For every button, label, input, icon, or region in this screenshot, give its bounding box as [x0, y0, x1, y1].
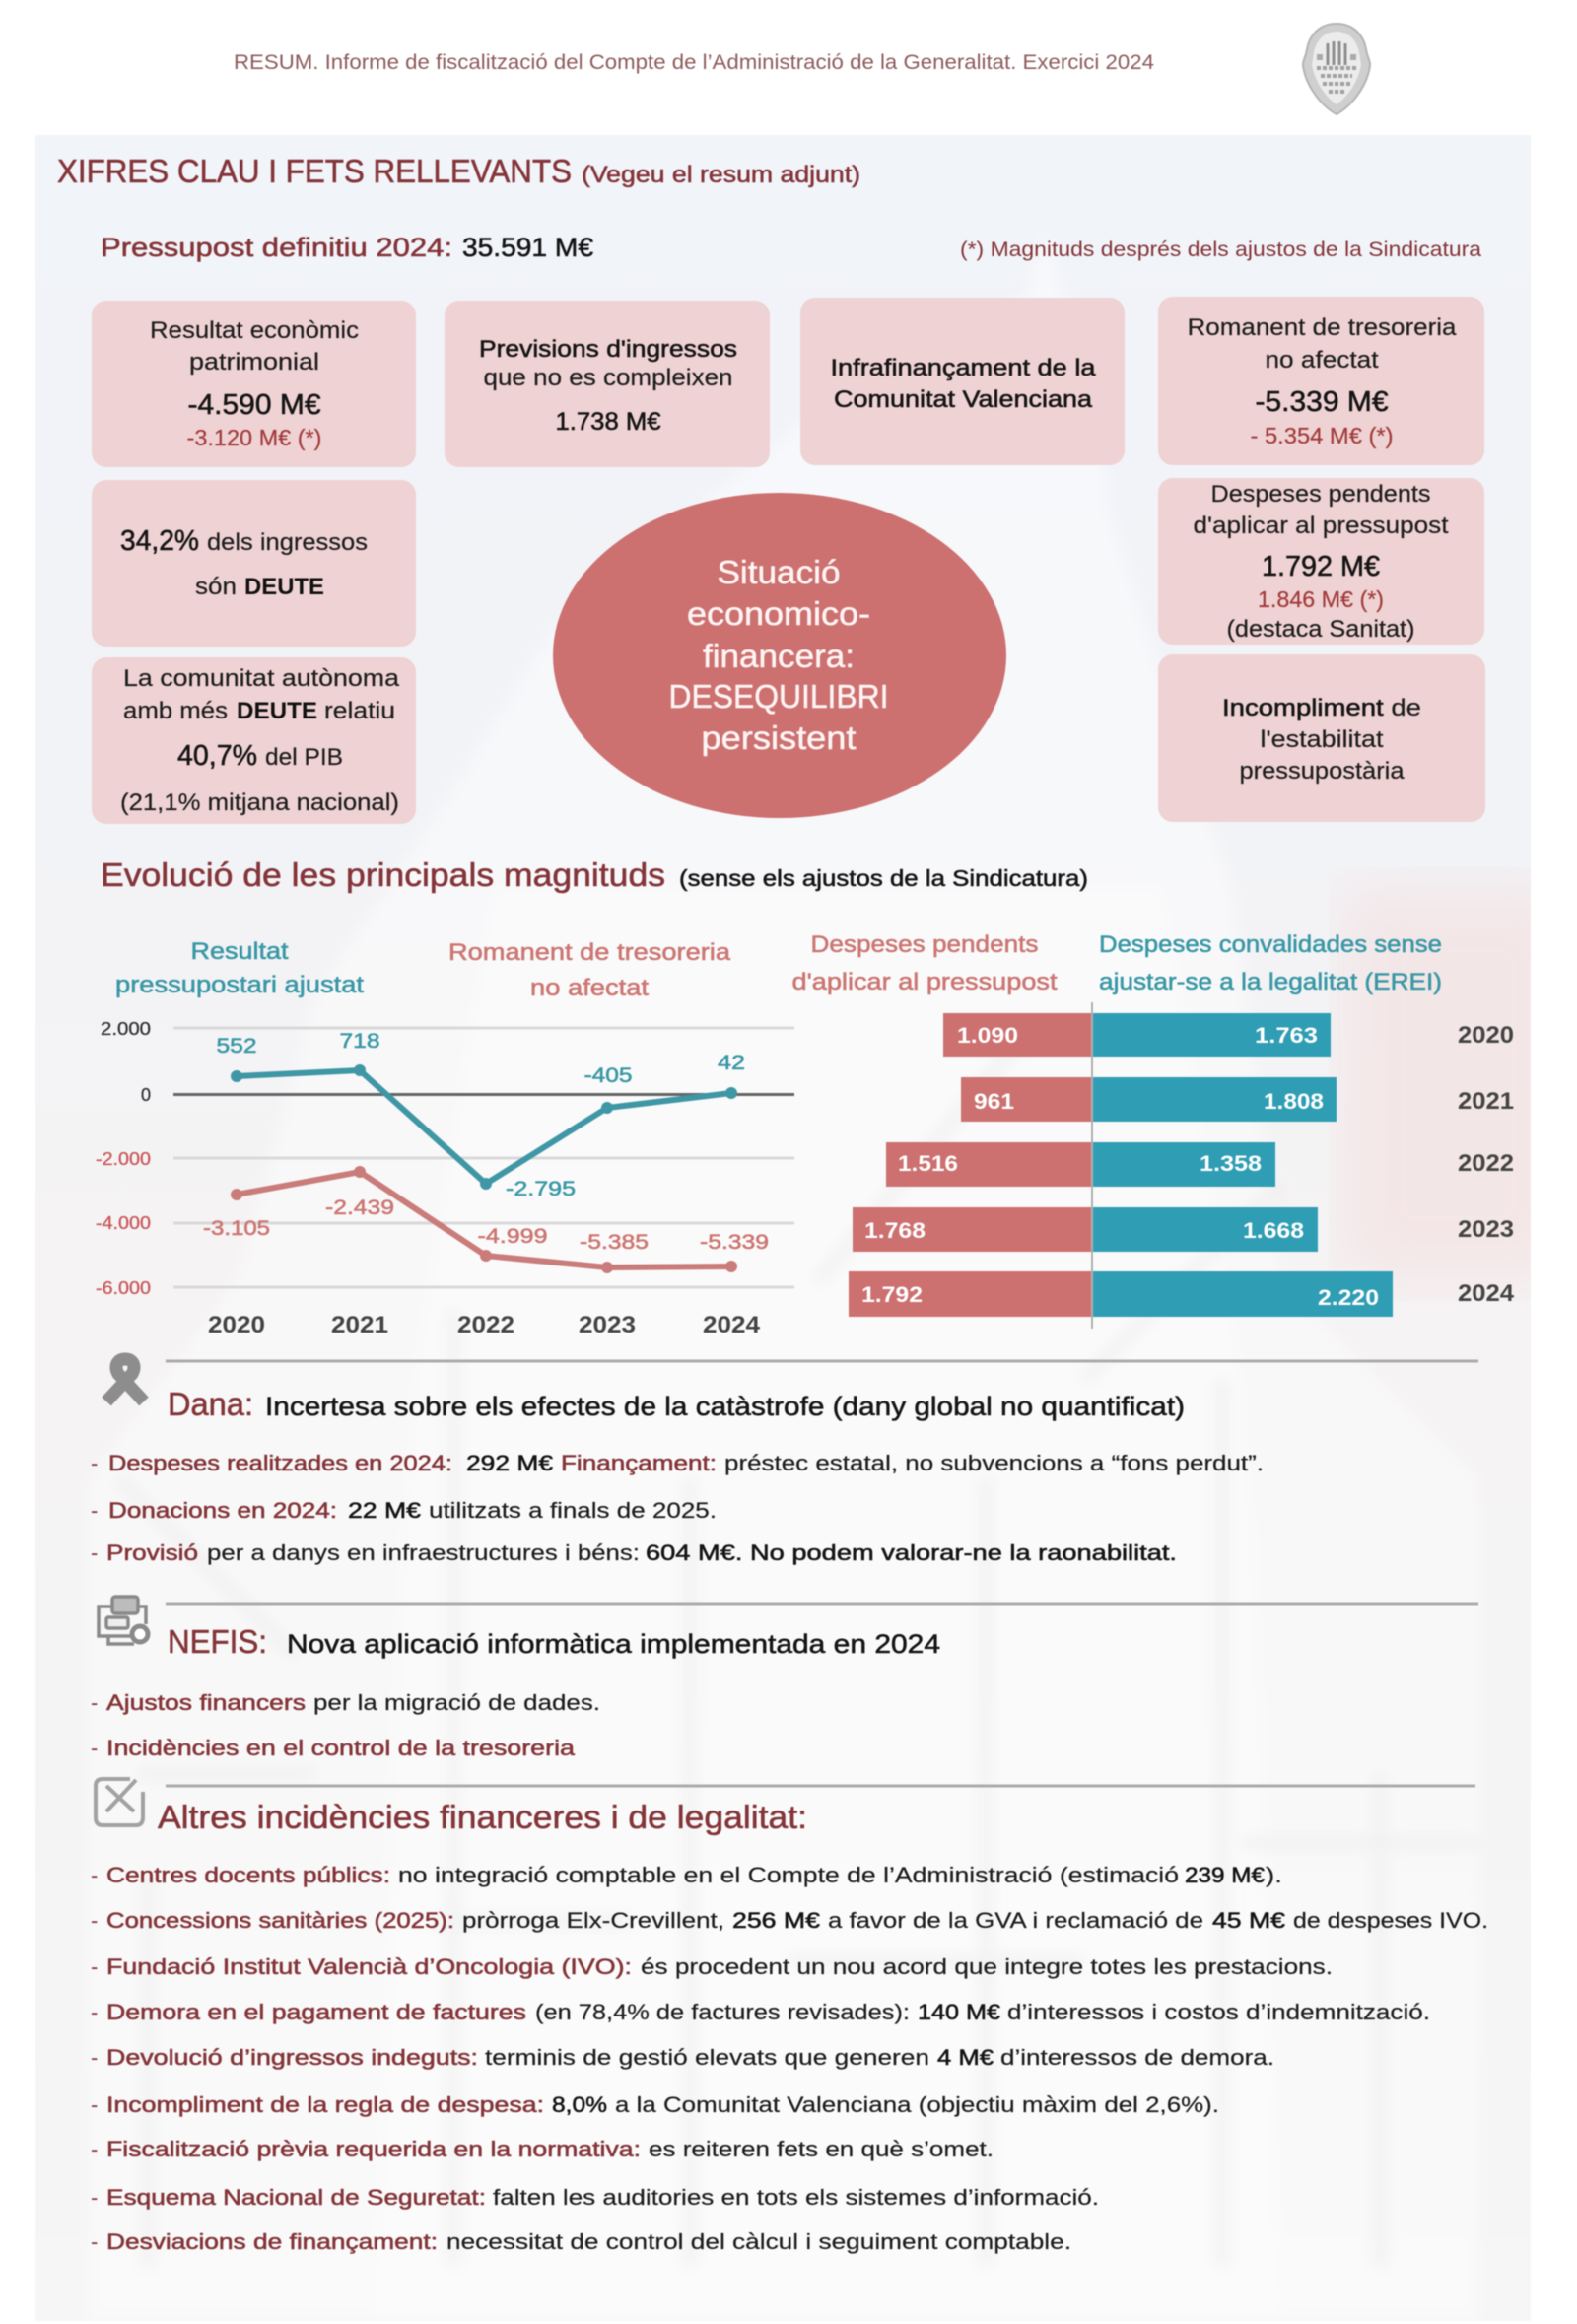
list item: IVO foundation: és procedent un nou acord que integre totes les prestacions.	[641, 1954, 1333, 1979]
list item: spending rule: Incompliment de la regla de despesa:	[106, 2092, 544, 2117]
list item: donations: -	[91, 1498, 98, 1523]
panel: pending expenses	[1158, 478, 1484, 645]
panel: pending expenses: d'aplicar al pressupost	[1193, 513, 1449, 539]
heading: other incidents: Altres incidències financeres i de legalitat:	[158, 1799, 807, 1835]
list item: provision: 604 M€. No podem valorar-ne la raonabilitat.	[646, 1540, 1177, 1565]
list item: health concessions: de despeses IVO.	[1293, 1908, 1488, 1933]
panel: highest relative debt: DEUTE	[237, 698, 317, 724]
panel: highest relative debt	[92, 657, 416, 824]
legend: adjusted budget result	[115, 938, 364, 998]
panel: unmet revenue forecasts: Previsions d'ingressos	[479, 336, 737, 363]
list item: IVO foundation	[91, 1954, 1333, 1979]
list item: data migration	[91, 1690, 600, 1715]
panel: unallocated treasury remainder: -5.339 M€	[1256, 386, 1388, 418]
list item: provision: Provisió	[106, 1540, 198, 1565]
panel: pending expenses: 1.846 M€ (*)	[1258, 586, 1384, 612]
panel: income from debt: són	[195, 574, 237, 600]
panel: underfunding	[800, 298, 1125, 465]
x axis years	[208, 1312, 761, 1338]
icon: crossed box	[96, 1779, 143, 1825]
panel: highest relative debt: (21,1% mitjana nacional)	[120, 789, 399, 816]
list item: public schools: Centres docents públics:	[106, 1863, 390, 1887]
list item: undue income refunds	[91, 2045, 1274, 2070]
bars: 2023: 2023	[1458, 1216, 1514, 1243]
section: other incidents	[91, 1779, 1488, 2254]
y axis labels: 2.000	[101, 1019, 151, 1039]
bars: 2024	[849, 1271, 1515, 1317]
chart: diverging bars of pending and validated expenses	[792, 931, 1515, 1329]
panel: economic result: -3.120 M€ (*)	[187, 425, 321, 450]
list item: spending rule: -	[91, 2092, 98, 2117]
series: budget result line: -405	[583, 1064, 633, 1087]
heading: evolution of main figures: (sense els ajustos de la Sindicatura)	[679, 865, 1088, 891]
section: NEFIS	[91, 1597, 940, 1760]
bars: 2021: 1.808	[1264, 1089, 1324, 1114]
panel: central diagnosis	[553, 493, 1006, 818]
bars: 2022	[886, 1142, 1514, 1187]
panel: highest relative debt: 40,7%	[177, 740, 257, 772]
legend: unallocated treasury remainder	[448, 939, 731, 1001]
panel: unallocated treasury remainder	[1158, 297, 1484, 465]
heading: Dana: Incertesa sobre els efectes de la catàstrofe (dany global no quantificat)	[265, 1392, 1185, 1421]
panel: pending expenses: Despeses pendents	[1210, 481, 1431, 508]
bars: 2021: 961	[974, 1089, 1014, 1114]
legend: pending expenses: d'aplicar al pressupost	[792, 969, 1058, 995]
list item: donations: 22 M€	[348, 1498, 421, 1523]
list item: prior audit: es reiteren fets en què s’omet.	[649, 2137, 994, 2161]
bars: 2021: 2021	[1458, 1088, 1514, 1115]
list item: funding deviations: necessitat de control del càlcul i seguiment comptable.	[446, 2229, 1071, 2254]
panel: highest relative debt: La comunitat autònoma	[123, 665, 400, 692]
list item: prior audit: Fiscalització prèvia requerida en la normativa:	[106, 2137, 641, 2161]
heading: evolution of main figures	[101, 856, 1088, 893]
panel: income from debt: 34,2%	[120, 525, 199, 557]
legend: validated expenses: ajustar-se a la legalitat (EREI)	[1099, 969, 1442, 995]
x axis years: 2024	[703, 1312, 761, 1338]
bars: 2024: 2.220	[1318, 1285, 1379, 1310]
series: budget result line: 42	[718, 1052, 745, 1074]
panel: pending expenses: (destaca Sanitat)	[1226, 616, 1415, 643]
title	[57, 153, 860, 189]
list item: funding deviations: Desviacions de finançament:	[106, 2229, 438, 2254]
panel: economic result	[92, 301, 416, 467]
x axis years: 2022	[457, 1312, 514, 1338]
panel: unmet revenue forecasts: 1.738 M€	[556, 408, 661, 436]
legend: adjusted budget result: Resultat	[191, 938, 289, 965]
bars: 2022: 1.358	[1200, 1151, 1262, 1176]
panel: income from debt: dels ingressos	[207, 529, 368, 556]
title: (Vegeu el resum adjunt)	[582, 162, 860, 188]
list item: prior audit	[91, 2137, 994, 2161]
list item: spending rule: a la Comunitat Valenciana (objectiu màxim del 2,6%).	[615, 2092, 1219, 2117]
panel: highest relative debt: relatiu	[324, 698, 395, 724]
list item: data migration: per la migració de dades.	[313, 1690, 600, 1715]
x axis years: 2021	[331, 1312, 388, 1338]
legend: validated expenses	[1099, 931, 1442, 995]
panel: underfunding: Comunitat Valenciana	[834, 386, 1093, 413]
list item: health concessions: 45 M€	[1212, 1908, 1285, 1933]
series: budget result line	[217, 1030, 745, 1200]
list item: IVO foundation: -	[91, 1954, 98, 1979]
panel: unallocated treasury remainder: - 5.354 M€ (*)	[1250, 423, 1394, 448]
list item: undue income refunds: terminis de gestió elevats que generen	[485, 2045, 929, 2070]
panel: pending expenses: 1.792 M€	[1262, 551, 1380, 582]
legend: unallocated treasury remainder: no afectat	[530, 975, 649, 1001]
panel: budget stability breach	[1158, 654, 1485, 822]
list item: expenses 2024: Despeses realitzades en 2024:	[108, 1451, 452, 1475]
icon: mourning ribbon	[106, 1359, 144, 1401]
list item: expenses 2024: Finançament:	[561, 1451, 717, 1475]
panel: unmet revenue forecasts: que no es compleixen	[483, 365, 733, 391]
list item: treasury control: -	[91, 1736, 98, 1760]
series: treasury remainder line: -5.339	[700, 1231, 769, 1254]
heading: NEFIS: NEFIS:	[168, 1623, 267, 1660]
heading: final budget: 35.591 M€	[462, 233, 593, 262]
bars: 2023: 1.768	[864, 1218, 926, 1243]
list item: data migration: Ajustos financers	[106, 1690, 306, 1715]
list item: undue income refunds: d’interessos de demora.	[1000, 2045, 1274, 2070]
list item: data migration: -	[91, 1690, 98, 1715]
list item: national security scheme	[91, 2185, 1099, 2210]
list item: national security scheme: falten les auditories en tots els sistemes d’informació.	[493, 2185, 1099, 2210]
list item: public schools: 239 M€	[1185, 1863, 1265, 1887]
list item: spending rule: 8,0%	[552, 2092, 607, 2117]
y axis labels: -6.000	[96, 1278, 151, 1298]
list item: prior audit: -	[91, 2137, 98, 2161]
panel: central diagnosis: Situació	[718, 554, 840, 590]
list item: public schools	[91, 1863, 1282, 1887]
list item: provision	[91, 1540, 1177, 1565]
title: XIFRES CLAU I FETS RELLEVANTS	[57, 153, 572, 189]
legend: unallocated treasury remainder: Romanent de tresoreria	[448, 939, 731, 966]
panel: unallocated treasury remainder: Romanent de tresoreria	[1187, 314, 1457, 341]
list item: national security scheme: Esquema Nacional de Seguretat:	[106, 2185, 486, 2210]
list item: health concessions: -	[91, 1908, 98, 1933]
icon: computer with gear	[99, 1597, 148, 1644]
list item: invoice payment delay: d’interessos i costos d’indemnització.	[1007, 2000, 1430, 2024]
note: after audit adjustments: (*) Magnituds després dels ajustos de la Sindicatura	[960, 239, 1481, 261]
panel: income from debt	[92, 480, 416, 647]
list item: health concessions: Concessions sanitàries (2025):	[106, 1908, 454, 1933]
panel: central diagnosis: financera:	[703, 638, 855, 674]
bars: 2024: 1.792	[861, 1282, 923, 1307]
bars: 2021	[961, 1077, 1514, 1122]
panel: underfunding: Infrafinançament de la	[830, 355, 1096, 381]
bars: 2020: 2020	[1458, 1022, 1514, 1049]
legend: pending expenses: Despeses pendents	[810, 931, 1039, 958]
section: Dana	[91, 1359, 1264, 1565]
series: budget result line: -2.795	[506, 1178, 576, 1200]
list item: health concessions: pròrroga Elx-Crevillent,	[462, 1908, 724, 1933]
list item: invoice payment delay: 140 M€	[918, 2000, 1000, 2024]
list item: expenses 2024	[91, 1451, 1264, 1475]
heading: Dana: Dana:	[168, 1386, 253, 1422]
panel: unmet revenue forecasts	[445, 301, 770, 467]
panel: highest relative debt: del PIB	[265, 744, 343, 771]
list item: undue income refunds: -	[91, 2045, 98, 2070]
panel: highest relative debt: amb més	[123, 698, 228, 724]
legend: adjusted budget result: pressupostari ajustat	[115, 972, 364, 998]
list item: invoice payment delay: -	[91, 2000, 98, 2024]
panel: budget stability breach: pressupostària	[1240, 758, 1405, 785]
list item: expenses 2024: préstec estatal, no subvencions a “fons perdut”.	[724, 1451, 1264, 1475]
list item: undue income refunds: 4 M€	[937, 2045, 994, 2070]
series: treasury remainder line: -2.439	[325, 1196, 394, 1219]
chart: line chart of budget result and treasury remainder	[96, 938, 794, 1338]
series: treasury remainder line: -3.105	[203, 1217, 270, 1240]
list item: donations: Donacions en 2024:	[108, 1498, 337, 1523]
list item: invoice payment delay	[91, 2000, 1430, 2024]
panel: central diagnosis: persistent	[702, 719, 856, 756]
list item: health concessions: a favor de la GVA i reclamació de	[828, 1908, 1203, 1933]
panel: budget stability breach: l'estabilitat	[1260, 726, 1384, 753]
series: budget result line: 552	[217, 1035, 256, 1058]
list item: donations: utilitzats a finals de 2025.	[429, 1498, 717, 1523]
list item: invoice payment delay: (en 78,4% de factures revisades):	[535, 2000, 910, 2024]
y axis labels: 0	[141, 1085, 151, 1105]
panel: central diagnosis: economico-	[687, 595, 870, 632]
icon: institutional shield logo	[1303, 24, 1370, 114]
bars: 2023	[853, 1207, 1514, 1252]
legend: validated expenses: Despeses convalidades sense	[1099, 931, 1442, 958]
panel: unallocated treasury remainder: no afectat	[1266, 347, 1379, 374]
list item: national security scheme: -	[91, 2185, 98, 2210]
heading: evolution of main figures: Evolució de les principals magnituds	[101, 856, 665, 893]
bars: 2022: 2022	[1458, 1150, 1514, 1177]
panel: economic result: Resultat econòmic	[150, 317, 359, 344]
y axis labels: -2.000	[96, 1149, 151, 1169]
series: treasury remainder line	[203, 1166, 769, 1273]
bars: 2023: 1.668	[1243, 1218, 1304, 1243]
list item: IVO foundation: Fundació Institut Valencià d’Oncologia (IVO):	[106, 1954, 632, 1979]
x axis years: 2020	[208, 1312, 265, 1338]
list item: public schools: -	[91, 1863, 98, 1887]
bars: 2022: 1.516	[898, 1151, 958, 1176]
panel: income from debt: DEUTE	[244, 574, 324, 600]
bars: 2020: 1.090	[957, 1023, 1018, 1048]
heading: NEFIS: Nova aplicació informàtica implementada en 2024	[287, 1629, 940, 1659]
legend: pending expenses	[792, 931, 1058, 995]
list item: treasury control: Incidències en el control de la tresoreria	[106, 1736, 576, 1760]
panel: budget stability breach: Incompliment de	[1222, 695, 1421, 721]
list item: undue income refunds: Devolució d’ingressos indeguts:	[106, 2045, 478, 2070]
panel: central diagnosis: DESEQUILIBRI	[668, 678, 889, 715]
bars: 2020	[943, 1013, 1514, 1057]
series: treasury remainder line: -4.999	[477, 1225, 548, 1248]
series: treasury remainder line: -5.385	[580, 1231, 649, 1254]
panel: economic result: patrimonial	[189, 349, 319, 376]
y axis labels: -4.000	[96, 1213, 151, 1233]
list item: expenses 2024: -	[91, 1451, 98, 1475]
list item: provision: per a danys en infraestructures i béns:	[207, 1540, 640, 1565]
list item: expenses 2024: 292 M€	[466, 1451, 553, 1475]
series: budget result line: 718	[339, 1030, 380, 1053]
list item: invoice payment delay: Demora en el pagament de factures	[106, 2000, 526, 2024]
heading: final budget	[101, 233, 593, 262]
list item: provision: -	[91, 1540, 98, 1565]
panel: economic result: -4.590 M€	[187, 389, 321, 421]
list item: public schools: ).	[1266, 1863, 1282, 1887]
list item: spending rule	[91, 2092, 1219, 2117]
list item: donations	[91, 1498, 717, 1523]
list item: public schools: no integració comptable en el Compte de l’Administració (estimació	[398, 1863, 1179, 1887]
list item: funding deviations	[91, 2229, 1071, 2254]
heading: Dana	[168, 1386, 1185, 1422]
list item: funding deviations: -	[91, 2229, 98, 2254]
x axis years: 2023	[579, 1312, 636, 1338]
list item: health concessions	[91, 1908, 1488, 1933]
heading: final budget: Pressupost definitiu 2024:	[101, 233, 452, 262]
list item: health concessions: 256 M€	[732, 1908, 820, 1933]
bars: 2020: 1.763	[1255, 1023, 1318, 1048]
header text: RESUM. Informe de fiscalització del Compte de l’Administració de la Generalitat. Exercici 2024	[234, 51, 1154, 74]
y axis labels	[96, 1019, 151, 1298]
bars: 2024: 2024	[1458, 1280, 1515, 1307]
heading: NEFIS	[168, 1623, 940, 1660]
